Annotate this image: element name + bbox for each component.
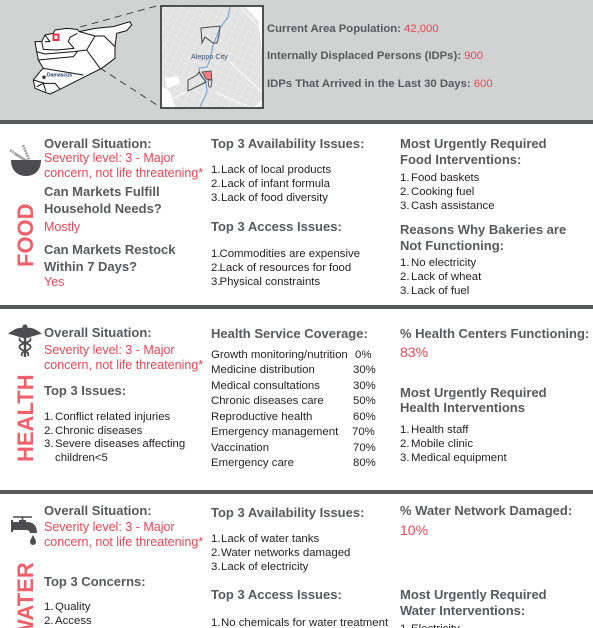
panel: water: Quality bbox=[55, 601, 90, 613]
panel: health: 70% bbox=[353, 442, 376, 454]
panel: food: No electricity bbox=[411, 257, 476, 269]
panel: health: 83% bbox=[400, 344, 428, 360]
panel: health: 3. bbox=[44, 438, 54, 450]
Damascus star: ★ bbox=[41, 74, 47, 82]
panel: health: 2. bbox=[44, 425, 54, 437]
panel: food: Household Needs? bbox=[44, 201, 162, 216]
panel: health: 80% bbox=[353, 457, 376, 469]
panel: health: Mobile clinic bbox=[411, 438, 473, 450]
panel: food: Food Interventions: bbox=[400, 152, 521, 167]
panel: health: Medical equipment bbox=[411, 452, 507, 464]
panel: food: concern, not life threatening* bbox=[44, 166, 203, 180]
panel: health: 70% bbox=[352, 426, 375, 438]
panel: health: Growth monitoring/nutrition bbox=[211, 349, 348, 361]
Damascus label: Damascus bbox=[47, 72, 72, 78]
availability issues: Top 3 Availability Issues: bbox=[211, 136, 364, 151]
panel: food: Lack of food diversity bbox=[221, 192, 328, 204]
map of Syria with inset of Aleppo City bbox=[32, 5, 264, 109]
panel: food bbox=[9, 136, 566, 297]
panel: food: Lack of wheat bbox=[411, 271, 481, 283]
stat: current area population: Current Area Population: 42,000 bbox=[267, 23, 439, 35]
availability issues: Top 3 Availability Issues: bbox=[211, 505, 364, 520]
panel: health: Chronic diseases bbox=[55, 425, 142, 437]
panel: health: Reproductive health bbox=[211, 411, 312, 423]
panel: food: 3. bbox=[211, 192, 220, 204]
overall situation: Overall Situation: bbox=[44, 136, 152, 151]
panel: health: 3. bbox=[400, 452, 410, 464]
panel: food: Severity level: 3 - Major bbox=[44, 151, 175, 165]
inset frame bbox=[161, 6, 263, 108]
panel: health bbox=[8, 324, 589, 469]
panel: health: Conflict related injuries bbox=[55, 411, 170, 423]
panel: health: 60% bbox=[353, 411, 376, 423]
vertical label: FOOD: FOOD bbox=[13, 203, 38, 267]
panel: water: 1. bbox=[211, 533, 220, 545]
panel: water: 10% bbox=[400, 522, 428, 538]
panel: health: 1. bbox=[400, 424, 410, 436]
Aleppo City label: Aleppo City bbox=[191, 52, 228, 61]
panel: health: Chronic diseases care bbox=[211, 395, 324, 407]
panel: food: Lack of local products bbox=[221, 164, 331, 176]
panel: water: Water networks damaged bbox=[221, 547, 350, 559]
highlighted area bbox=[202, 71, 212, 80]
panel: health: children<5 bbox=[55, 452, 108, 464]
panel: food: Mostly bbox=[44, 220, 80, 234]
panel: health: Emergency care bbox=[211, 457, 294, 469]
panel: water: 1. bbox=[44, 601, 54, 613]
panel: food: 2. bbox=[211, 262, 220, 274]
stat: recent IDP arrivals: IDPs That Arrived in the Last 30 Days: 600 bbox=[267, 78, 493, 90]
panel: health: Vaccination bbox=[211, 442, 269, 454]
panel: health: Severity level: 3 - Major bbox=[44, 343, 175, 357]
food interventions: Most Urgently Required bbox=[400, 136, 547, 151]
Syria governorates map bbox=[33, 22, 132, 94]
panel: food: Yes bbox=[44, 275, 64, 289]
market fulfilment: Can Markets Fulfill bbox=[44, 184, 160, 199]
panel: food: 3. bbox=[400, 200, 410, 212]
panel: water bbox=[11, 503, 572, 628]
top concerns: Top 3 Concerns: bbox=[44, 574, 146, 589]
icon: caduceus bbox=[8, 324, 42, 357]
Aleppo location marker bbox=[54, 34, 58, 40]
health interventions: Most Urgently Required bbox=[400, 385, 547, 400]
panel: health: Health Interventions bbox=[400, 400, 525, 415]
access issues: Top 3 Access Issues: bbox=[211, 219, 342, 234]
panel: food: Not Functioning: bbox=[400, 238, 504, 253]
panel: health: Medicine distribution bbox=[211, 364, 315, 376]
overall situation: Overall Situation: bbox=[44, 325, 152, 340]
panel: health: 2. bbox=[400, 438, 410, 450]
panel: food: Lack of resources for food bbox=[220, 262, 351, 274]
header panel: location and population bbox=[0, 0, 593, 124]
panel: food: 1. bbox=[400, 257, 410, 269]
top issues: Top 3 Issues: bbox=[44, 383, 126, 398]
river bbox=[199, 7, 230, 107]
panel: food: Lack of infant formula bbox=[221, 178, 330, 190]
service coverage: Health Service Coverage: bbox=[211, 326, 368, 341]
panel: food: 2. bbox=[400, 186, 410, 198]
panel: health: 30% bbox=[353, 380, 376, 392]
panel: health: Medical consultations bbox=[211, 380, 320, 392]
panel: water: 3. bbox=[211, 561, 220, 573]
stat: internally displaced persons: Internally Displaced Persons (IDPs): 900 bbox=[267, 50, 483, 62]
panel: food: Cooking fuel bbox=[411, 186, 474, 198]
panel: food: Lack of fuel bbox=[411, 285, 469, 297]
panel: food: 2. bbox=[400, 271, 410, 283]
panel: food: 3. bbox=[400, 285, 410, 297]
access issues: Top 3 Access Issues: bbox=[211, 587, 342, 602]
icon: water tap bbox=[11, 516, 37, 545]
panel: food: Cash assistance bbox=[411, 200, 495, 212]
health centers functioning: % Health Centers Functioning: bbox=[400, 326, 589, 341]
panel: food: Within 7 Days? bbox=[44, 259, 137, 274]
panel: health: Severe diseases affecting bbox=[55, 438, 185, 450]
panel: food: Food baskets bbox=[411, 172, 479, 184]
panel: water: Lack of electricity bbox=[221, 561, 308, 573]
panel: water: Lack of water tanks bbox=[221, 533, 319, 545]
water interventions: Most Urgently Required bbox=[400, 587, 547, 602]
panel: food: 2. bbox=[211, 178, 220, 190]
panel: health: 50% bbox=[353, 395, 376, 407]
overall situation: Overall Situation: bbox=[44, 503, 152, 518]
panel: health: 30% bbox=[353, 364, 376, 376]
panel: health: Health staff bbox=[411, 424, 468, 436]
market restock: Can Markets Restock bbox=[44, 242, 176, 257]
panel: health: concern, not life threatening* bbox=[44, 358, 203, 372]
panel: health: 1. bbox=[44, 411, 54, 423]
panel: water: Water Interventions: bbox=[400, 603, 525, 618]
bakeries: Reasons Why Bakeries are bbox=[400, 222, 566, 237]
panel: water: Access bbox=[55, 615, 92, 627]
neighbourhood outlines bbox=[201, 26, 220, 43]
panel: food: 3. bbox=[211, 276, 220, 288]
panel: water: Severity level: 3 - Major bbox=[44, 520, 175, 534]
inset city map bbox=[161, 6, 263, 108]
dashed zoom lines bbox=[80, 5, 160, 107]
panel: water: 2. bbox=[44, 615, 54, 627]
panel: food: Commodities are expensive bbox=[220, 248, 360, 260]
panel: water: concern, not life threatening* bbox=[44, 535, 203, 549]
vertical label: HEALTH: HEALTH bbox=[13, 374, 38, 462]
water network damaged: % Water Network Damaged: bbox=[400, 503, 572, 518]
panel: water: 2. bbox=[211, 547, 220, 559]
panel: health: Emergency management bbox=[211, 426, 338, 438]
panel: food: 1. bbox=[211, 248, 220, 260]
panel: health: 0% bbox=[355, 349, 371, 361]
panel: food: 1. bbox=[400, 172, 410, 184]
panel: food: 1. bbox=[211, 164, 220, 176]
icon: bowl of wheat bbox=[9, 144, 41, 176]
panel: food: Physical constraints bbox=[220, 276, 320, 288]
